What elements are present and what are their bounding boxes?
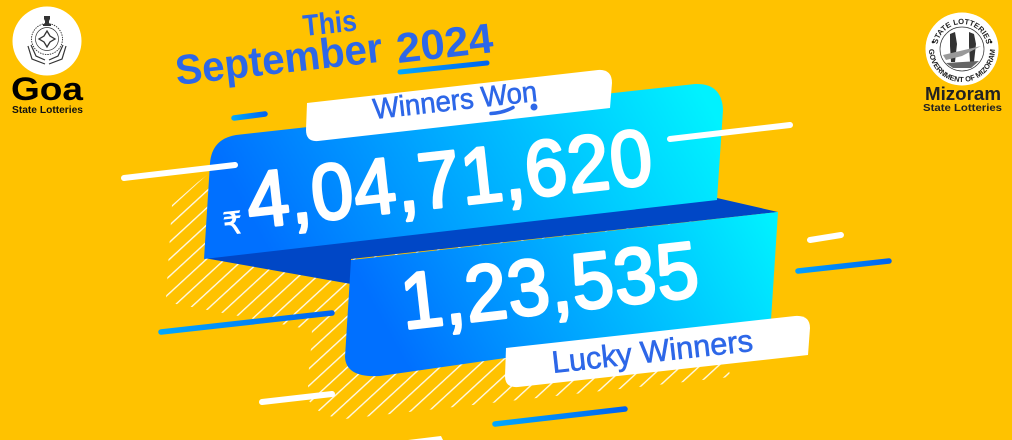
accent line: white right	[670, 125, 790, 139]
accent dash: top left	[234, 114, 265, 118]
hatched pattern behind banners	[166, 150, 730, 419]
icon: Mizoram seal: STATE LOTTERIES	[932, 18, 992, 44]
logo: Mizoram State Lotteries	[923, 12, 1002, 114]
underline under 2024	[400, 63, 487, 72]
winners count number: 1,23,535	[396, 225, 704, 346]
label shape: Lucky Winners	[505, 316, 810, 387]
heading word: September: September	[173, 24, 385, 94]
icon: Goa emblem	[12, 6, 82, 76]
label text: Winners Won: Winners Won	[371, 76, 539, 126]
accent line: white left	[124, 165, 235, 178]
label text: Lucky Winners: Lucky Winners	[550, 323, 755, 380]
accent dash: white right	[810, 235, 841, 240]
banner shape: prize amount	[204, 84, 723, 259]
Goa wordmark: Goa	[11, 71, 83, 107]
accent line: white bottom	[262, 394, 332, 402]
Goa subtitle: State Lotteries	[12, 105, 83, 116]
label: Winners Won	[306, 70, 612, 141]
rupee symbol: ₹	[221, 205, 244, 243]
Mizoram subtitle: State Lotteries	[923, 102, 1002, 114]
banner: prize amount	[204, 84, 723, 259]
label: Lucky Winners	[505, 316, 810, 387]
dot on swoosh	[530, 104, 538, 110]
icon: Mizoram seal: GOVERNMENT OF MIZORAM	[929, 49, 996, 82]
heading word: This: This	[301, 4, 358, 43]
banner shape: winners count	[345, 212, 778, 376]
prize amount number: 4,04,71,620	[242, 113, 657, 245]
Mizoram wordmark: Mizoram	[925, 84, 1001, 104]
accent line: blue bottom	[495, 409, 625, 424]
label shape: Winners Won	[306, 70, 612, 141]
icon: Mizoram seal	[926, 12, 998, 86]
heading year: 2024: 2024	[394, 14, 496, 72]
banner: winners count	[345, 212, 778, 376]
logo: Goa State Lotteries	[11, 6, 83, 116]
heading: This September 2024	[173, 4, 496, 94]
accent line: blue right	[798, 261, 889, 271]
accent line: white bottom edge	[408, 436, 443, 440]
accent line: blue left	[161, 313, 332, 332]
banner shadow fold	[204, 198, 778, 284]
swoosh under Won	[491, 108, 513, 114]
